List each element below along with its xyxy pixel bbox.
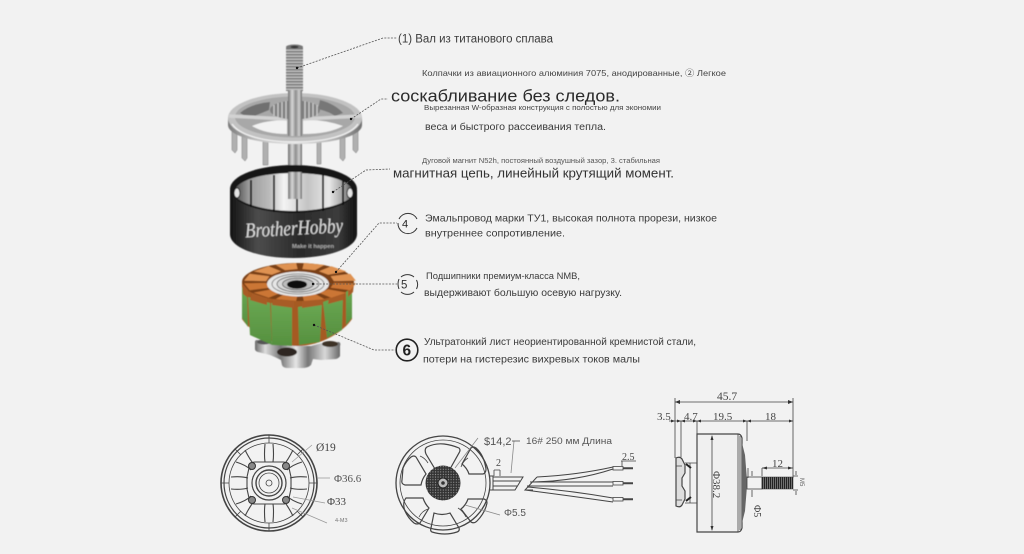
- dimension labels: 45.7: [717, 391, 737, 403]
- copper windings: [242, 263, 354, 301]
- dimension labels: Φ38.2: [710, 471, 722, 498]
- callout 4: Эмальпровод марки ТУ1, высокая полнота прорези, низкое: [425, 212, 717, 224]
- dimension labels: $14,2: [484, 436, 512, 448]
- brand logo: BrotherHobby: [244, 213, 344, 242]
- drawing: front view: [221, 435, 362, 531]
- dimension labels: 4.7: [684, 411, 698, 423]
- motor outline: [676, 434, 793, 532]
- number badge 5: 5: [401, 280, 407, 292]
- dimension labels: 3.5: [657, 411, 671, 423]
- callout 5: [424, 271, 622, 299]
- number badge 4: 4: [402, 218, 408, 230]
- callout 6: [423, 337, 696, 366]
- callout 2 large line: соскабливание без следов.: [391, 86, 620, 106]
- number badge 5: [398, 275, 418, 294]
- dimension labels: 2: [496, 458, 501, 469]
- callout 2 small line: Вырезанная W-образная конструкция с полостью для экономии: [424, 103, 661, 112]
- dimension labels: Φ33: [327, 496, 347, 508]
- dimension labels: [316, 442, 362, 524]
- number badge 4: [398, 213, 417, 234]
- dimension lines: [669, 398, 798, 531]
- dimension labels: [484, 436, 634, 519]
- base flange: [255, 340, 340, 368]
- dimension labels: 16# 250 мм Длина: [526, 436, 613, 447]
- number badge 6: [396, 339, 418, 361]
- drawing: side view with dimensions: [657, 391, 804, 532]
- dimension labels: 2.5: [622, 452, 634, 463]
- callout 4: [425, 212, 717, 240]
- callout 1: (1) Вал из титанового сплава: [398, 34, 554, 46]
- dimension labels: [657, 391, 804, 517]
- dimension labels: Φ5.5: [504, 508, 526, 519]
- copper and green stator: [242, 263, 356, 346]
- dimension labels: M5: [798, 478, 804, 487]
- callout 2 last line: веса и быстрого рассеивания тепла.: [425, 121, 606, 133]
- callout 3 large line: магнитная цепь, линейный крутящий момент.: [393, 166, 674, 180]
- black magnet ring with logo: [230, 165, 357, 258]
- dimension labels: 12: [772, 458, 783, 470]
- dimension labels: 4-M3: [335, 518, 348, 524]
- callout 6: Ультратонкий лист неориентированной кремнистой стали,: [424, 337, 696, 348]
- feature text blocks: [391, 34, 726, 366]
- aluminium bell cap: [228, 90, 362, 180]
- black magnet ring with logo: Make it happen: [292, 244, 334, 250]
- green stator laminations: [242, 287, 352, 346]
- dimension labels: Φ36.6: [334, 473, 362, 485]
- dimension labels: 18: [765, 411, 776, 423]
- callout 6: потери на гистерезис вихревых токов малы: [423, 354, 640, 366]
- callout 4: внутреннее сопротивление.: [425, 228, 565, 240]
- dimension labels: Ø19: [316, 442, 336, 454]
- drawing: rear view with wires: [396, 436, 636, 534]
- dimension labels: Φ5: [751, 505, 762, 517]
- callout 5: выдерживают большую осевую нагрузку.: [424, 287, 622, 299]
- leader lines: [296, 38, 397, 350]
- number badge 6: 6: [402, 342, 412, 360]
- callout 3 small line: Дуговой магнит N52h, постоянный воздушный зазор, 3. стабильная: [422, 157, 660, 165]
- central shaft: [286, 44, 303, 180]
- dimension labels: 19.5: [713, 411, 733, 423]
- wires: [490, 466, 633, 502]
- exploded motor illustration: [228, 44, 362, 368]
- callout 5: Подшипники премиум-класса NMB,: [426, 271, 580, 281]
- callout 2 line 1: Колпачки из авиационного алюминия 7075, анодированные, ② Легкое: [422, 68, 726, 78]
